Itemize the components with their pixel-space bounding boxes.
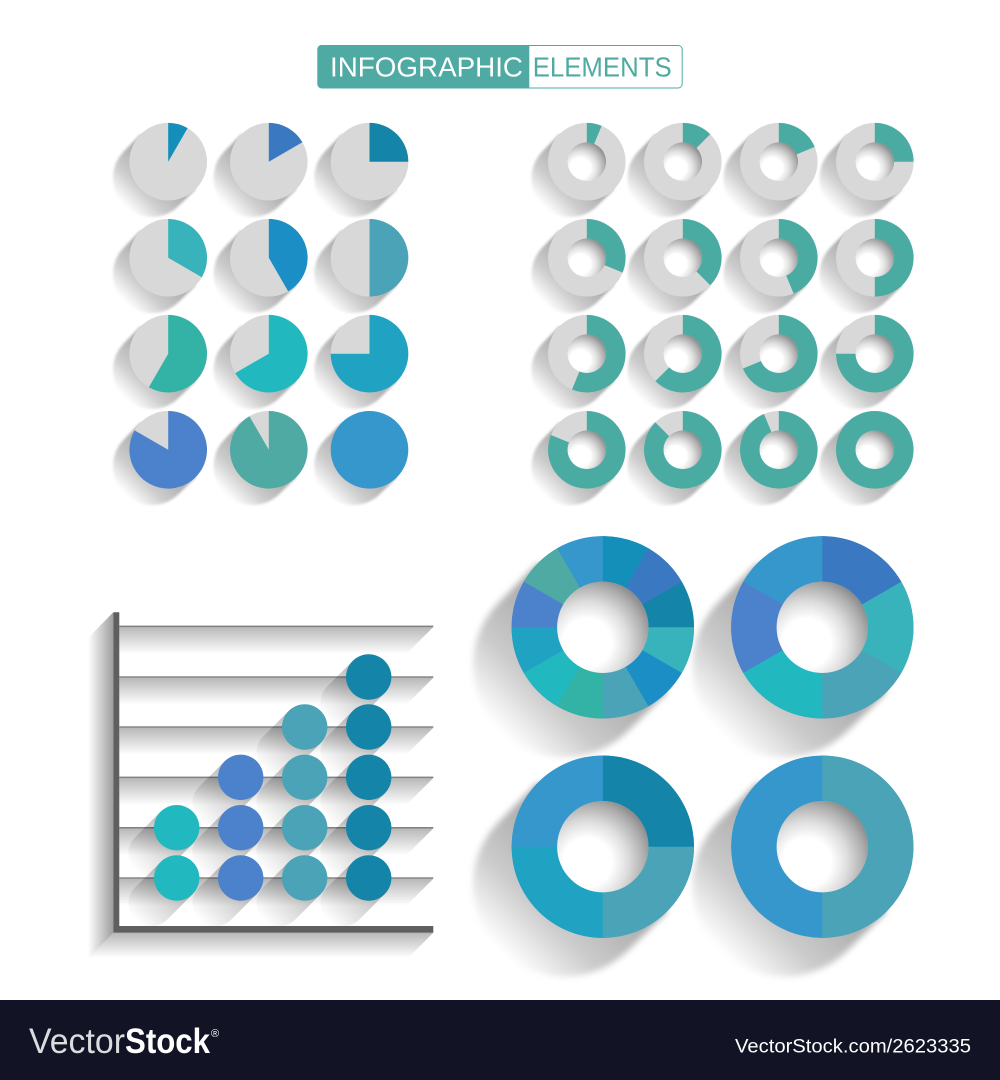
donut 14 of 16 (611, 411, 722, 521)
pie 12 of 12 (298, 411, 408, 521)
donut 3 of 16 (707, 123, 818, 233)
donut 2 of 16 (611, 123, 722, 233)
panel: pie charts (97, 123, 408, 521)
dot column 1 (154, 805, 199, 901)
donut 4 of 16 (803, 123, 914, 233)
dot column 3 (282, 704, 327, 901)
chart axis shadows (88, 612, 433, 958)
footer image id: VectorStock.com/2623335 (735, 1036, 971, 1058)
pie 8 of 12 (197, 315, 308, 425)
donut with 4 segments (435, 756, 694, 1014)
footer logo: Vector (29, 1022, 125, 1061)
dot column 2 (218, 755, 263, 901)
donut 15 of 16 (707, 411, 818, 521)
panel: segmented donuts (435, 513, 941, 1014)
donut 7 of 16 (707, 219, 818, 329)
pie 9 of 12 (298, 315, 408, 425)
donut 9 of 16 (515, 315, 626, 425)
title banner: ELEMENTS (533, 52, 672, 83)
pie 4 of 12 (97, 219, 207, 329)
donut 11 of 16 (707, 315, 818, 425)
donut 8 of 16 (803, 219, 914, 329)
pie 2 of 12 (197, 123, 308, 233)
pie 6 of 12 (298, 219, 408, 329)
chart: dot bar chart (88, 612, 433, 958)
title banner (318, 45, 682, 88)
pie 5 of 12 (197, 219, 308, 329)
pie 3 of 12 (298, 123, 408, 233)
footer logo: Stock (125, 1022, 210, 1061)
pie 10 of 12 (97, 411, 207, 521)
donut 6 of 16 (611, 219, 722, 329)
chart grid line shadows (119, 627, 433, 906)
donut 10 of 16 (611, 315, 722, 425)
chart dot shadows (119, 661, 385, 936)
footer bar (0, 1000, 1000, 1080)
panel: progress donuts (515, 123, 914, 521)
donut with 12 segments (435, 526, 705, 795)
title banner: INFOGRAPHIC (330, 52, 523, 83)
donut 5 of 16 (515, 219, 626, 329)
pie 7 of 12 (97, 315, 207, 425)
pie 1 of 12 (97, 123, 207, 233)
footer logo (29, 1022, 219, 1061)
donut 12 of 16 (803, 315, 914, 425)
donut with 6 segments (655, 513, 941, 795)
donut 1 of 16 (515, 123, 626, 233)
dot column 4 (346, 654, 391, 901)
donut 13 of 16 (515, 411, 626, 521)
chart axes (113, 612, 433, 933)
donut 16 of 16 (803, 411, 914, 521)
donut with 2 segments (655, 756, 914, 1014)
pie 11 of 12 (197, 411, 308, 521)
footer logo: ® (211, 1028, 219, 1040)
chart grid lines (119, 626, 433, 879)
